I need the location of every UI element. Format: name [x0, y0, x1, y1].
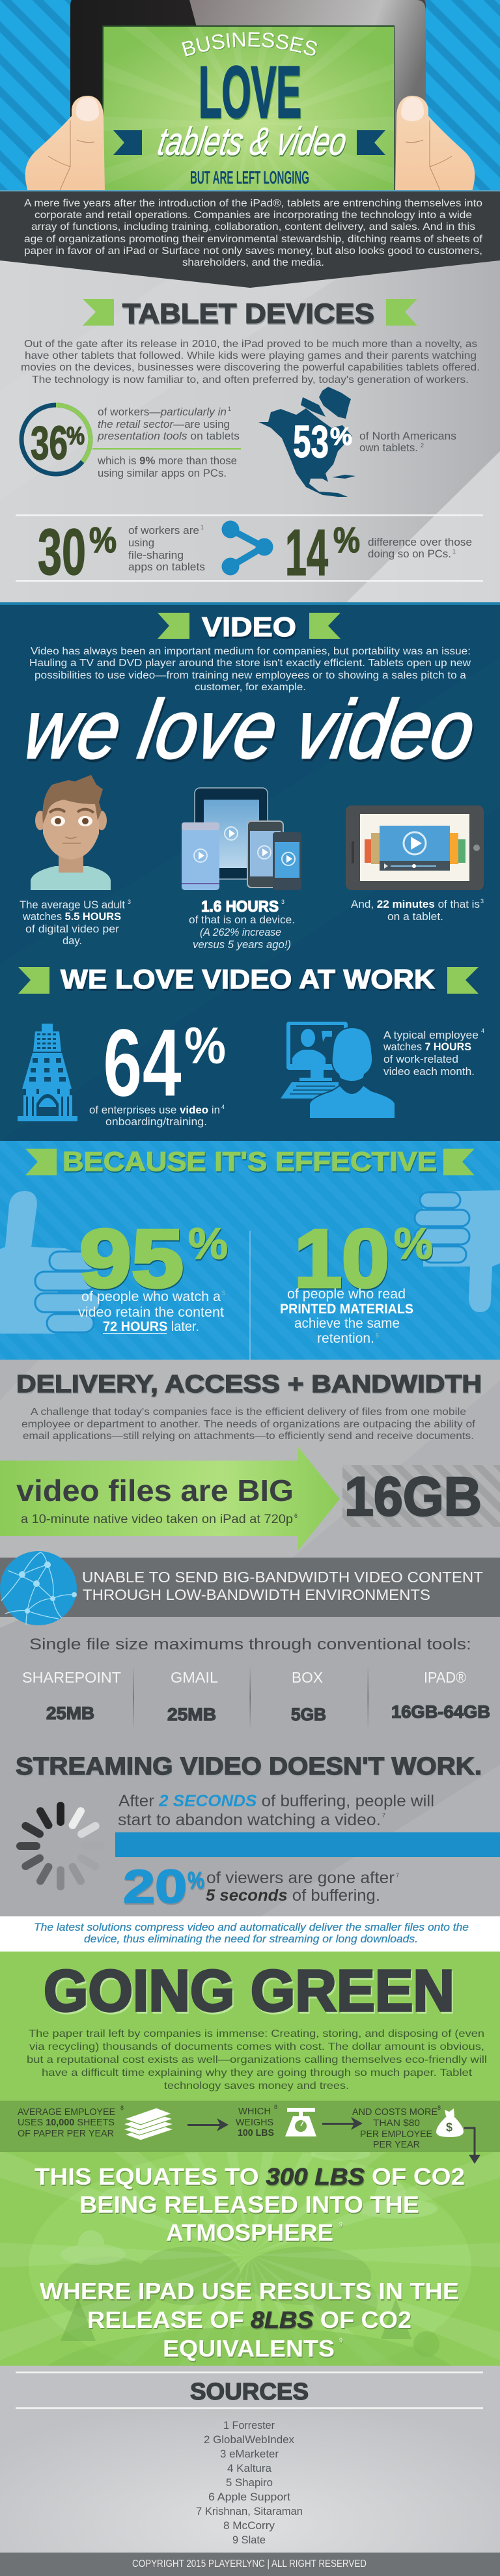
text: intro paragraph: corporate and retail operations. Companies are incorporating the technology into a wide — [35, 210, 472, 221]
icon: right ribbon — [357, 130, 385, 155]
text: video paragraph: Video has always been an important medium for companies, but portability was an issue: — [31, 646, 471, 657]
panel: solutions callout: The latest solutions compress video and automatically deliver the smaller files onto the — [34, 1922, 469, 1933]
icon: money bag: $ — [446, 2121, 452, 2134]
text: ipad statement — [40, 2278, 459, 2362]
panel: video — [0, 602, 500, 1141]
table: file size maximums: 16GB-64GB — [391, 1702, 490, 1722]
text: ipad statement: 9 — [339, 2337, 342, 2344]
stat: 64 percent: 64 — [103, 1009, 182, 1117]
text: typical employee: 4 — [481, 1028, 484, 1034]
heading: sources: SOURCES — [190, 2378, 309, 2405]
text: tablet paragraph: Out of the gate after its release in 2010, the iPad proved to be much more than a novelty, as — [24, 339, 477, 350]
text: 10 percent caption: of people who read — [287, 1287, 406, 1302]
text: and costs more: AND COSTS MORE — [352, 2107, 438, 2118]
chart: 36 percent ring — [21, 405, 90, 474]
heading: going green: GOING GREEN — [44, 1959, 454, 2024]
icon: network globe — [0, 1551, 77, 1625]
list: sources: 7 Krishnan, Sitaraman — [196, 2505, 303, 2517]
stat: 20 percent: 20 — [123, 1861, 187, 1913]
text: delivery paragraph: employee or department to another. The needs of organizations are outpacing the ability of — [21, 1419, 476, 1430]
icon: thumbs up hand — [0, 1191, 100, 1334]
text: 36 percent description: which is 9% more than those — [97, 455, 237, 467]
text: ipad statement: WHERE IPAD USE RESULTS IN THE — [40, 2278, 459, 2304]
text: device caption: of that is on a device. — [189, 914, 295, 926]
arrow: paper to weight — [188, 2118, 229, 2131]
stat: 16GB: 16GB — [344, 1466, 482, 1527]
text: file sharing: apps on tablets — [128, 561, 205, 573]
icon: thumbs down hand — [415, 1190, 500, 1312]
text: 10 percent caption: retention. — [317, 1331, 374, 1346]
text: average employee — [18, 2105, 124, 2139]
text: file sharing: 1 — [201, 524, 204, 531]
text: 5 seconds: of viewers are gone after — [206, 1869, 395, 1887]
text: north americans — [359, 430, 456, 454]
list: sources: 8 McCorry — [223, 2519, 275, 2532]
list: sources: 4 Kaltura — [227, 2462, 272, 2474]
table: file size maximums: BOX — [292, 1669, 323, 1686]
text: enterprises caption: onboarding/training. — [105, 1115, 207, 1128]
panel: tablet devices — [0, 190, 500, 605]
text: 10 percent caption: PRINTED MATERIALS — [280, 1302, 413, 1317]
text: intro paragraph: paper in favor of an iPad or Surface not only saves money, but also looks good to customers, — [24, 245, 482, 257]
heading: delivery access bandwidth: DELIVERY, ACCESS + BANDWIDTH — [16, 1371, 482, 1398]
table: file size maximums: IPAD® — [424, 1669, 466, 1686]
text: average adult caption: watches 5.5 HOURS — [22, 910, 121, 923]
text: north americans: 2 — [421, 442, 424, 449]
stat: 53 percent: % — [330, 423, 352, 451]
text: typical employee — [383, 1028, 484, 1078]
text: typical employee: video each month. — [383, 1065, 475, 1078]
banner: low bandwidth: UNABLE TO SEND BIG-BANDWIDTH VIDEO CONTENT — [82, 1569, 483, 1586]
text: typical employee: watches 7 HOURS — [383, 1041, 471, 1053]
text: video paragraph: Hauling a TV and DVD player around the store isn't exactly efficient. Tablets open up new — [29, 658, 471, 669]
text: intro paragraph: array of functions, including training, collaboration, content delivery, and sales. And in this — [31, 221, 475, 232]
text: and costs more — [352, 2105, 441, 2150]
icon: scale — [285, 2108, 316, 2136]
subtitle: BUT ARE LEFT LONGING — [190, 167, 309, 188]
table: file size maximums: 5GB — [291, 1705, 326, 1724]
text: paper trail paragraph: via recycling) thousands of documents comes with cost. The dollar amount is obvious, — [29, 2041, 484, 2052]
stat: 95 percent — [79, 1212, 228, 1304]
text: 5 seconds: 5 seconds of buffering. — [206, 1886, 380, 1905]
stat: 14 percent: % — [333, 520, 360, 560]
text: tablet paragraph: The technology is now familiar to, and often preferred by, today's generation of workers. — [32, 374, 469, 385]
text: after 2 seconds: After 2 SECONDS of buffering, people will — [118, 1792, 434, 1810]
heading: video: VIDEO — [202, 611, 296, 642]
heading: we love video at work: WE LOVE VIDEO AT WORK — [61, 964, 435, 994]
text: 10 percent caption: 5 — [376, 1332, 379, 1339]
stat: 95 percent: % — [188, 1219, 228, 1268]
icon: left ribbon — [113, 130, 142, 155]
table: file size maximums: 25MB — [46, 1703, 94, 1723]
stat: 10 percent: 10 — [294, 1212, 389, 1304]
icon: right hand — [395, 96, 475, 191]
icon: money bag — [436, 2108, 464, 2137]
panel: delivery, access and bandwidth — [0, 1360, 500, 1916]
table: file size maximums: 25MB — [167, 1705, 216, 1724]
panel: going green — [0, 1952, 500, 2366]
text: tablet paragraph: movies on the devices, businesses were discovering the powerful capabilities tablets offered. — [21, 362, 480, 373]
bar: buffering progress — [115, 1832, 500, 1857]
text: video paragraph: possibilities to use video—from training new employees or to showing a sales pitch to a — [35, 670, 466, 681]
stat: 30 percent: 30 — [38, 516, 86, 589]
text: after 2 seconds — [118, 1792, 434, 1829]
text: file sharing — [128, 524, 205, 573]
text: device caption: 3 — [281, 899, 285, 905]
text: co2 statement: BEING RELEASED INTO THE — [79, 2191, 419, 2218]
panel: solutions callout: device, thus eliminating the need for streaming or long downloads. — [84, 1933, 418, 1945]
stat: 10 percent — [294, 1212, 433, 1304]
text: and costs more: PER YEAR — [373, 2139, 420, 2150]
text: co2 statement: 9 — [339, 2221, 342, 2228]
text: 95 percent caption: of people who watch a — [81, 1289, 221, 1304]
text: intro paragraph — [24, 198, 483, 268]
arrow: video files are big: a 10-minute native video taken on iPad at 720p — [21, 1513, 293, 1526]
text: device caption: (A 262% increase — [200, 926, 281, 938]
text: typical employee: of work-related — [383, 1053, 458, 1065]
text: co2 statement: THIS EQUATES TO 300 LBS OF CO2 — [35, 2163, 465, 2190]
chart: 36 percent ring: 36 — [31, 417, 68, 469]
icon: paper stack — [123, 2108, 174, 2140]
text: and costs more: THAN $80 — [373, 2118, 420, 2129]
text: 95 percent caption: 72 HOURS later. — [103, 1319, 199, 1334]
text: 36 percent description: of workers—particularly in — [98, 406, 227, 418]
text: enterprises caption: of enterprises use video in — [89, 1104, 220, 1116]
list: sources — [196, 2419, 303, 2546]
stat: 64 percent: % — [184, 1016, 226, 1074]
text: tablet paragraph — [21, 339, 480, 385]
heading: because it's effective: BECAUSE IT'S EFFECTIVE — [62, 1146, 437, 1177]
text: which weighs: 8 — [274, 2104, 277, 2110]
text: video paragraph — [29, 646, 471, 693]
stat: 30 percent: % — [89, 520, 117, 560]
text: which weighs — [236, 2104, 277, 2138]
text: device caption: versus 5 years ago!) — [193, 938, 291, 951]
arrow: video files are big: 6 — [294, 1513, 298, 1519]
icon: green ribbons — [83, 299, 417, 326]
text: 10 percent caption — [280, 1287, 413, 1346]
stat: 10 percent: % — [394, 1219, 433, 1268]
list: sources: 1 Forrester — [223, 2419, 275, 2431]
text: ipad statement: RELEASE OF 8LBS OF CO2 — [87, 2306, 411, 2333]
icon: tablet device — [70, 0, 426, 190]
arrow: video files are big: video files are BIG — [16, 1474, 294, 1507]
text: 95 percent caption: 5 — [222, 1290, 225, 1296]
list: sources: 5 Shapiro — [226, 2476, 273, 2489]
text: paper trail paragraph: have a difficult time explaining why they are going through so much paper. Tablet — [42, 2067, 473, 2079]
text: which weighs: WHICH — [238, 2106, 271, 2117]
footer: COPYRIGHT 2015 PLAYERLYNC | ALL RIGHT RESERVED — [132, 2558, 367, 2569]
text: and costs more: 8 — [438, 2105, 441, 2111]
text: 95 percent caption: video retain the content — [78, 1305, 224, 1320]
icon: effective ribbons — [25, 1149, 475, 1175]
text: 5 seconds — [206, 1869, 399, 1905]
text: paper trail paragraph: technology saves money and trees. — [164, 2080, 349, 2092]
text: average employee: USES 10,000 SHEETS — [18, 2117, 115, 2128]
text: file sharing: file-sharing — [128, 550, 184, 561]
text: video paragraph: customer, for example. — [195, 682, 306, 693]
table: file size maximums — [22, 1665, 490, 1730]
text: 36 percent description: 1 — [228, 406, 231, 412]
icon: devices — [182, 788, 301, 890]
panel: paper cost flow — [0, 2101, 500, 2164]
panel: because it's effective — [0, 1141, 500, 1360]
table: file size maximums: SHAREPOINT — [22, 1669, 121, 1686]
text: which weighs: 100 LBS — [238, 2127, 274, 2138]
arrow: weight to cost — [322, 2117, 363, 2130]
text: average employee: OF PAPER PER YEAR — [18, 2128, 114, 2139]
text: device caption: 1.6 HOURS — [201, 898, 279, 916]
icon: share — [222, 521, 273, 575]
text: paper trail paragraph: but a reputational cost exists as well—organizations calling themselves eco-friendly will — [27, 2054, 487, 2065]
panel: sources — [0, 2366, 500, 2553]
list: sources: 6 Apple Support — [208, 2491, 290, 2503]
title: businesses: BUSINESSES — [182, 32, 318, 57]
text: average adult caption: of digital video per — [25, 923, 119, 935]
panel: hero header with tablet — [0, 0, 500, 190]
text: delivery paragraph: email applications—still relying on attachments—to efficiently send and receive documents. — [23, 1431, 474, 1442]
text: 5 seconds: 7 — [396, 1872, 399, 1879]
icon: north america map — [258, 387, 355, 497]
heading: tablet devices: TABLET DEVICES — [122, 298, 374, 329]
text: average adult caption: The average US adult — [20, 899, 125, 911]
banner: low bandwidth: THROUGH LOW-BANDWIDTH ENVIRONMENTS — [83, 1586, 430, 1603]
text: single file size: Single file size maximums through conventional tools: — [29, 1636, 471, 1653]
icon: at work ribbons — [18, 967, 479, 994]
arrow: video files are big — [0, 1447, 340, 1550]
text: average adult caption — [20, 899, 131, 947]
text: average adult caption: 3 — [128, 899, 131, 905]
list: sources: 9 Slate — [232, 2534, 266, 2546]
text: paper trail paragraph — [27, 2028, 487, 2092]
panel: intro band — [0, 190, 500, 288]
text: difference: doing so on PCs. — [368, 548, 451, 560]
stat: 20 percent: % — [188, 1867, 204, 1894]
text: intro paragraph: shareholders, and the media. — [182, 257, 324, 268]
text: difference: difference over those — [368, 537, 472, 548]
stat: 20 percent — [123, 1861, 204, 1913]
text: enterprises caption — [89, 1104, 225, 1128]
text: delivery paragraph: A challenge that today's companies face is the efficient delivery of files from one mobile — [31, 1407, 466, 1418]
text: ipad statement: EQUIVALENTS — [163, 2335, 335, 2362]
text: file sharing: using — [128, 537, 154, 549]
footer — [0, 2553, 500, 2576]
text: file sharing: of workers are — [128, 525, 199, 537]
text: north americans: own tablets. — [359, 442, 418, 454]
illustration: sunburst landscape — [0, 2152, 500, 2362]
text: difference — [368, 537, 472, 560]
text: intro paragraph: A mere five years after the introduction of the iPad®, tablets are entrenching themselves into — [24, 198, 482, 209]
text: tablet paragraph: have other tablets that followed. While kids were playing games and their parents watching — [25, 350, 477, 361]
text: and costs more: PER EMPLOYEE — [360, 2129, 432, 2140]
stat: 14 percent: 14 — [285, 516, 328, 589]
icon: loading spinner — [20, 1806, 101, 1886]
icon: person at computer — [281, 1022, 395, 1119]
panel: solutions callout — [0, 1916, 500, 1952]
text: device caption — [189, 898, 295, 951]
icon: tablet video player — [346, 805, 484, 890]
text: tablet caption — [351, 898, 484, 923]
text: 10 percent caption: achieve the same — [294, 1316, 400, 1331]
text: typical employee: A typical employee — [383, 1029, 479, 1041]
text: 36 percent description: using similar apps on PCs. — [98, 468, 227, 479]
text: 95 percent caption — [78, 1289, 225, 1334]
text: 36 percent description: presentation tools on tablets — [97, 430, 240, 442]
text: average employee: 8 — [120, 2105, 124, 2111]
text: after 2 seconds: start to abandon watching a video. — [118, 1811, 381, 1829]
icon: left hand — [25, 96, 105, 191]
title: love: LOVE — [199, 51, 301, 133]
text: average employee: AVERAGE EMPLOYEE — [18, 2107, 115, 2118]
stat: 95 percent: 95 — [79, 1212, 184, 1304]
table: file size maximums: GMAIL — [171, 1669, 218, 1686]
text: tablet caption: 3 — [480, 898, 484, 904]
text: 36 percent description — [92, 406, 241, 479]
banner: low bandwidth — [0, 1558, 500, 1617]
icon: video ribbons — [158, 613, 340, 639]
text: which weighs: WEIGHS — [236, 2117, 273, 2128]
text: co2 statement: ATMOSPHERE — [166, 2219, 333, 2246]
text: average adult caption: day. — [62, 934, 82, 947]
icon: man — [31, 775, 111, 890]
icon: office building — [18, 1024, 77, 1121]
text: after 2 seconds: 7 — [382, 1812, 385, 1819]
text: tablet caption: on a tablet. — [387, 910, 443, 923]
text: delivery paragraph — [21, 1407, 476, 1442]
list: sources: 3 eMarketer — [220, 2448, 279, 2460]
text: north americans: of North Americans — [359, 430, 456, 442]
text: intro paragraph: age of organizations promoting their environmental stewardship, ditching reams of sheets of — [24, 234, 483, 245]
text: paper trail paragraph: The paper trail left by companies is immense: Creating, storing, and disposing of (even — [29, 2028, 484, 2039]
text: difference: 1 — [452, 548, 456, 555]
chart: 36 percent ring: % — [66, 423, 85, 450]
text: enterprises caption: 4 — [221, 1104, 225, 1110]
title: tablets and video: tablets & video — [155, 119, 350, 163]
text: 36 percent description: the retail sector—are using — [98, 419, 230, 430]
list: sources: 2 GlobalWebIndex — [204, 2433, 294, 2446]
text: co2 statement — [35, 2163, 465, 2246]
stat: 53 percent: 53 — [293, 416, 329, 467]
heading: streaming video doesn't work: STREAMING VIDEO DOESN'T WORK. — [16, 1753, 482, 1780]
arrow: cost to co2 — [464, 2128, 480, 2164]
text: tablet caption: And, 22 minutes of that is — [351, 898, 480, 910]
